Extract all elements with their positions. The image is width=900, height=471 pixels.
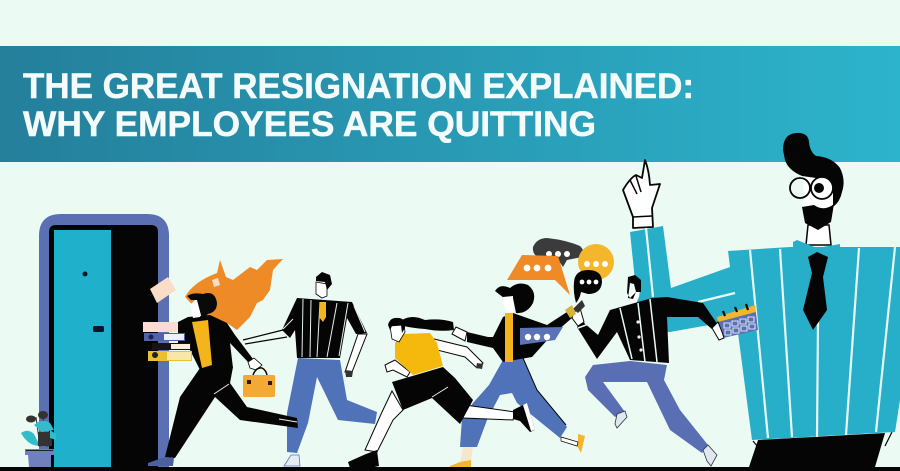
head [630, 290, 640, 303]
raised hand [623, 160, 660, 228]
title [23, 67, 694, 144]
big man [623, 133, 900, 467]
shorts [392, 367, 473, 424]
face [503, 296, 513, 313]
necktie [319, 302, 326, 322]
hair [495, 284, 534, 313]
shoes [615, 411, 627, 428]
running shoes [348, 450, 379, 468]
door [39, 214, 169, 467]
person: woman with blue bubble [450, 284, 585, 467]
hand holding phone [572, 308, 584, 326]
big man trousers [749, 433, 885, 467]
file stack [143, 322, 192, 361]
head [390, 325, 405, 342]
white legs [365, 391, 403, 452]
person: man in black jacket with calendar [572, 275, 718, 466]
ponytail [402, 317, 454, 331]
arm toward first woman [243, 330, 287, 344]
neck [806, 225, 831, 245]
right arm [345, 334, 367, 372]
title: WHY EMPLOYEES ARE QUITTING [23, 105, 596, 144]
jacket [178, 315, 253, 370]
trousers [460, 358, 567, 447]
shoes [561, 434, 585, 453]
ground line [0, 467, 900, 471]
blue bubble [520, 327, 563, 345]
orange bubble [507, 255, 570, 295]
jacket [467, 312, 572, 362]
collar [793, 240, 840, 252]
calendar [712, 304, 758, 340]
hand with phone [565, 305, 576, 318]
shoe [284, 455, 300, 466]
black bubble [574, 270, 602, 303]
title banner [0, 46, 900, 162]
person: man with striped jacket [243, 272, 377, 466]
flame hair [185, 259, 283, 330]
speech bubbles [507, 238, 614, 303]
shirt [395, 333, 443, 375]
briefcase [243, 368, 275, 397]
shoe [148, 457, 174, 466]
jacket [577, 297, 718, 363]
title: THE GREAT RESIGNATION EXPLAINED: [23, 67, 694, 106]
yellow bubble [578, 244, 614, 280]
plant [21, 411, 56, 467]
person: woman with fire and files [143, 259, 298, 466]
person: runner in yellow shirt [348, 317, 535, 468]
hand through door [150, 277, 176, 303]
arms [430, 338, 483, 368]
necktie [803, 252, 828, 330]
head [187, 293, 217, 319]
yellow top [192, 320, 212, 368]
head [783, 133, 844, 230]
teal striped shirt [630, 226, 900, 440]
head [316, 282, 327, 298]
hand [248, 358, 262, 370]
trousers [287, 358, 377, 453]
trousers [165, 367, 298, 458]
dark bubble [533, 238, 584, 267]
jacket [282, 298, 367, 358]
trousers [585, 361, 708, 453]
